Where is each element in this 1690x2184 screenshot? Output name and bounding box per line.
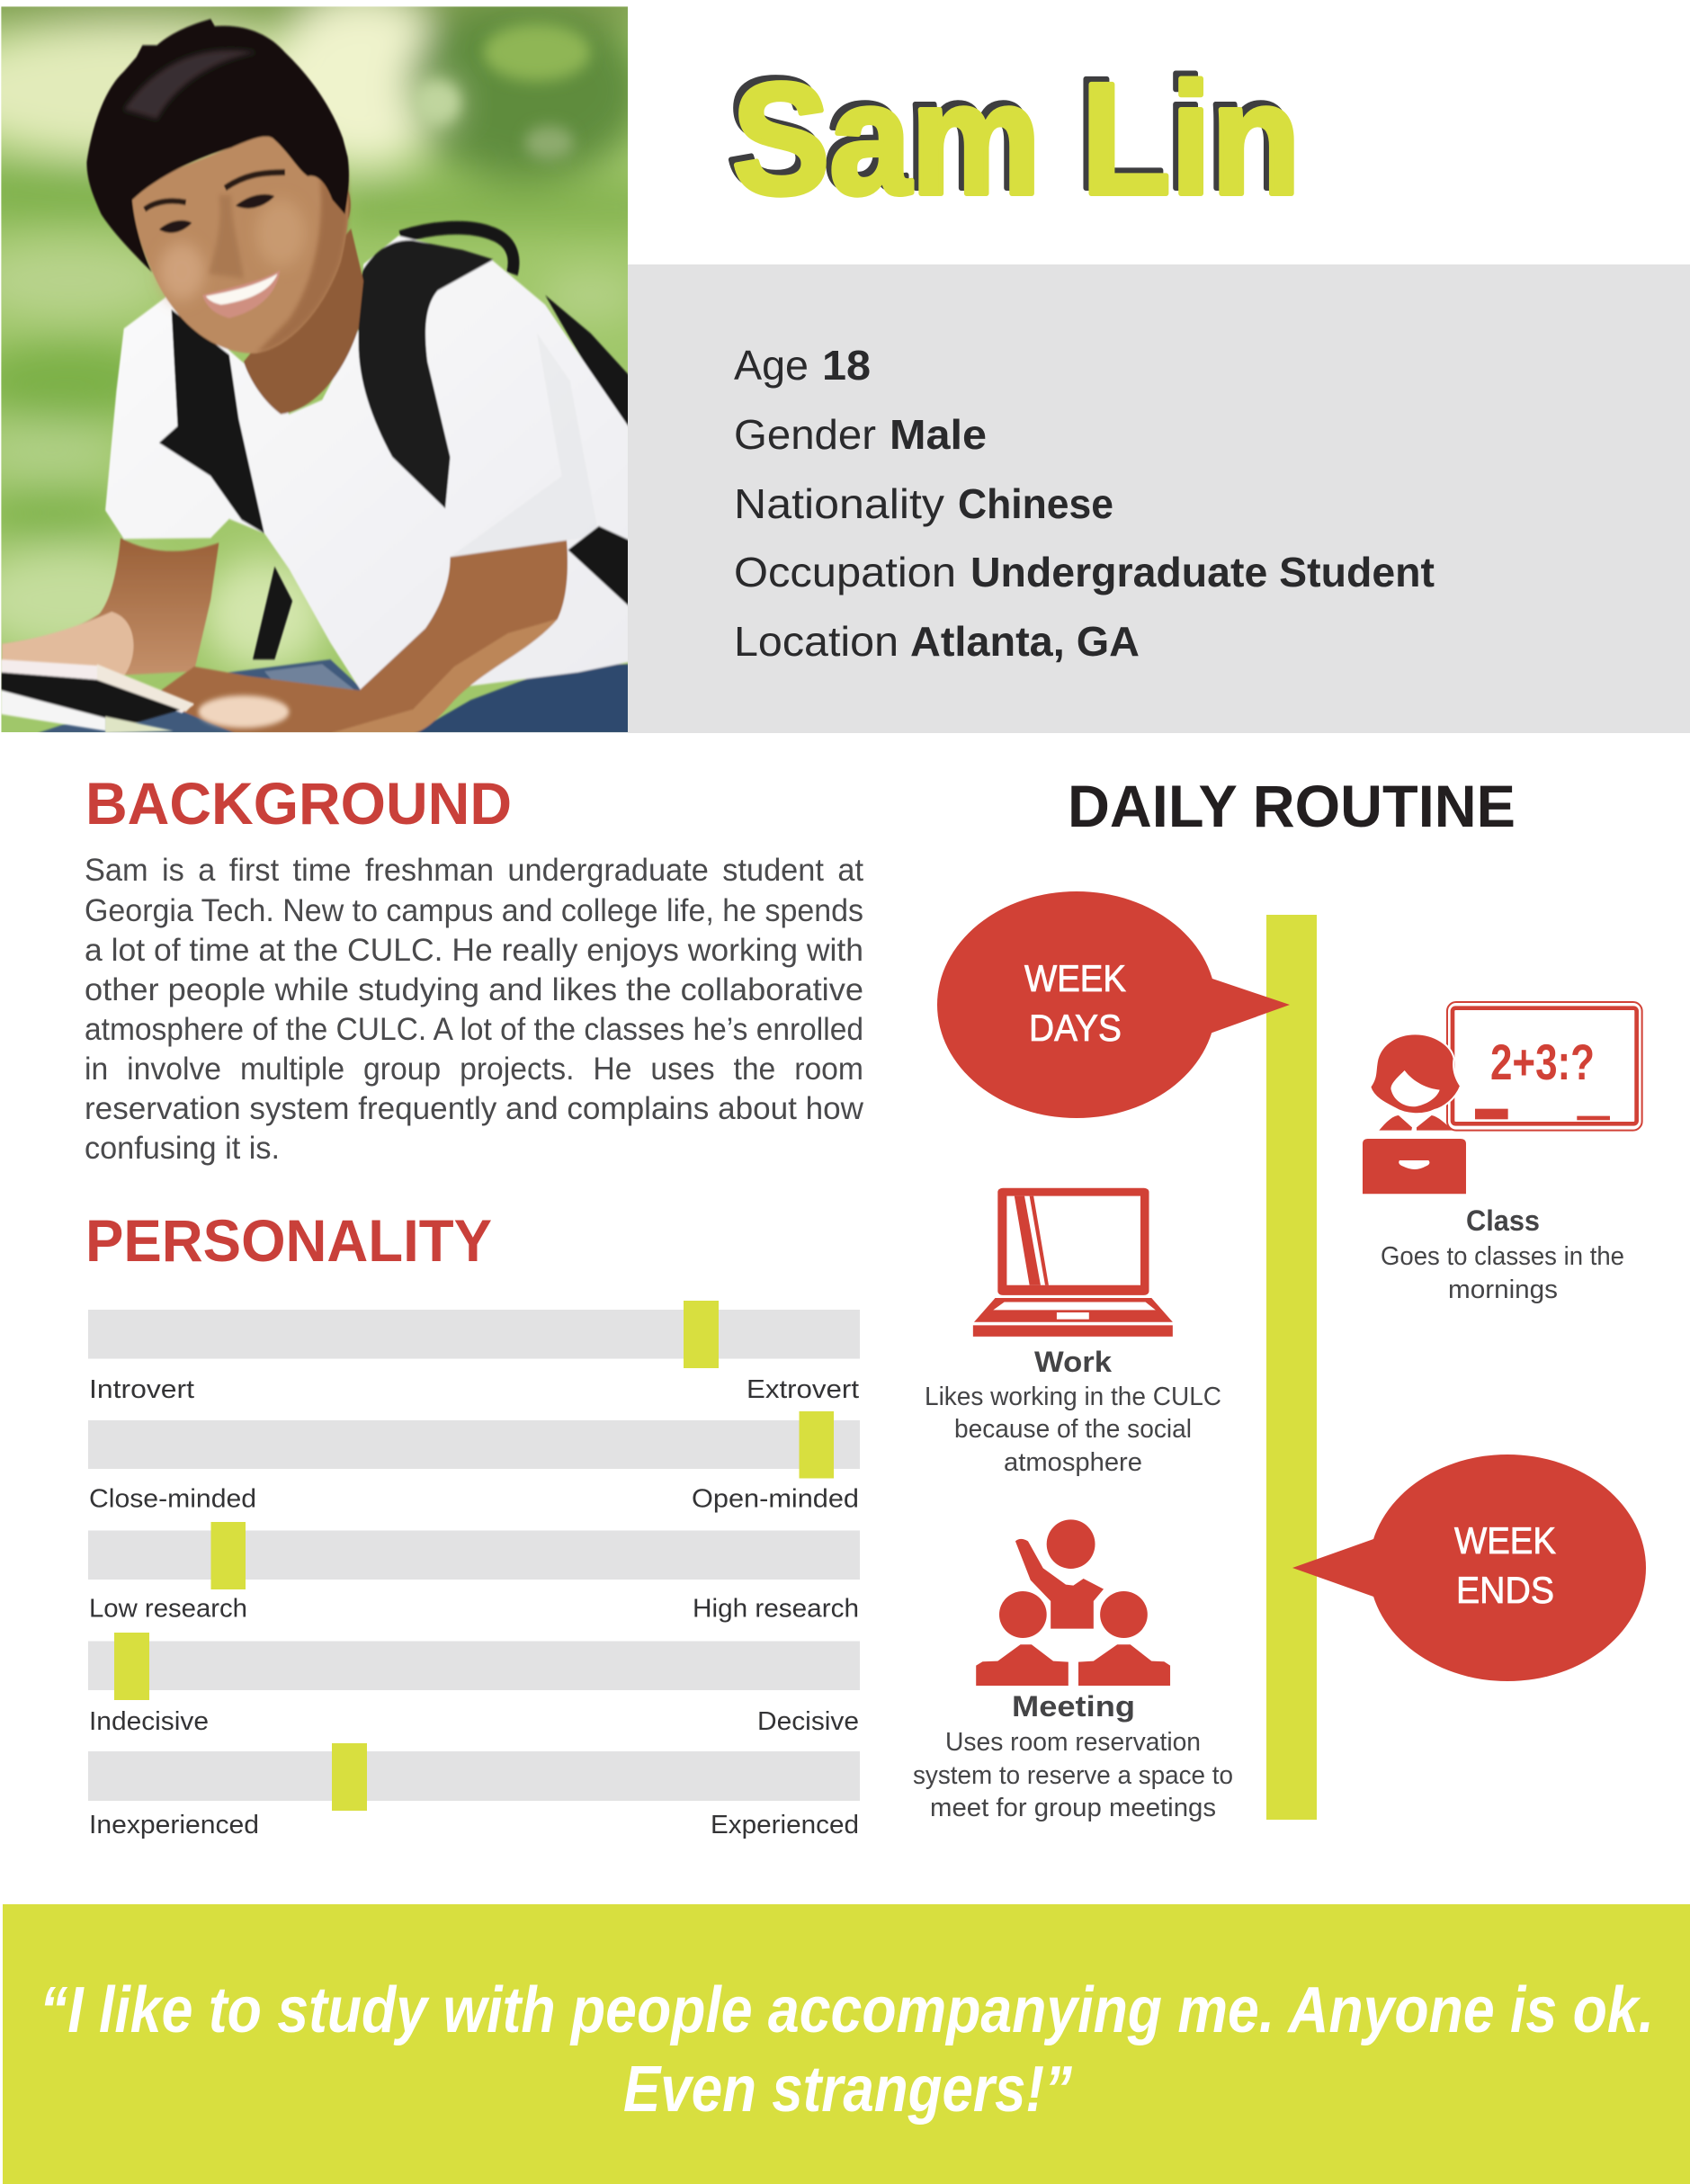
text block: background description: reservation system frequently and complains about how	[85, 1091, 864, 1126]
age: 18	[822, 342, 871, 389]
slider: inexperienced to experienced: Experienced	[711, 1811, 859, 1839]
occupation: Undergraduate Student	[970, 549, 1435, 595]
hair	[86, 19, 349, 273]
slider: introvert to extrovert	[88, 1301, 860, 1404]
lower strap	[253, 567, 292, 659]
text: work: because of the social	[954, 1415, 1192, 1444]
callout: week days	[937, 891, 1290, 1118]
occupation	[734, 549, 1435, 595]
text: meeting: system to reserve a space to	[913, 1761, 1233, 1790]
gender: Gender	[734, 411, 876, 458]
text block: background description: other people while studying and likes the collaborative	[85, 972, 863, 1007]
text: meeting	[913, 1690, 1233, 1822]
slider: close-minded to open-minded: Close-minded	[89, 1484, 256, 1513]
heading: personality: PERSONALITY	[85, 1207, 492, 1274]
age	[734, 342, 871, 389]
text: class: Goes to classes in the	[1381, 1242, 1624, 1271]
right arm	[161, 541, 568, 733]
left arm	[84, 538, 219, 676]
callout: week ends: WEEK	[1454, 1519, 1556, 1562]
text block: background description: Georgia Tech. New to campus and college life, he spends	[85, 893, 863, 928]
text: class	[1381, 1204, 1624, 1304]
face	[124, 124, 348, 354]
text block: background description: atmosphere of the CULC. A lot of the classes he’s enrolled	[85, 1012, 863, 1047]
text: work: atmosphere	[1004, 1448, 1142, 1477]
location: Atlanta, GA	[910, 618, 1140, 665]
smile	[202, 271, 280, 318]
callout: week days: WEEK	[1024, 957, 1126, 999]
slider: low research to high research	[88, 1522, 860, 1623]
text block: background description: confusing it is.	[85, 1131, 280, 1166]
callout: week ends	[1292, 1455, 1646, 1681]
text block: background description: a lot of time at the CULC. He really enjoys working with	[85, 933, 863, 968]
text: meeting: meet for group meetings	[930, 1794, 1216, 1822]
eyes	[159, 220, 192, 233]
gender: Male	[890, 411, 987, 458]
gender	[734, 411, 987, 458]
text: work: Likes working in the CULC	[925, 1383, 1221, 1411]
slider: inexperienced to experienced: Inexperienced	[89, 1811, 259, 1839]
left backpack strap	[159, 309, 264, 533]
text block: background description: Sam is a first time freshman undergraduate student at	[85, 853, 863, 888]
panel: name heading: Sam Lin	[732, 51, 1301, 228]
location	[734, 618, 1140, 665]
slider: introvert to extrovert: Extrovert	[747, 1375, 859, 1404]
slider: indecisive to decisive	[88, 1633, 860, 1736]
ear	[331, 183, 351, 226]
text: work: Work	[1034, 1346, 1112, 1378]
slider: indecisive to decisive: Decisive	[757, 1707, 859, 1736]
chart: personality sliders	[88, 1301, 860, 1839]
photo: smiling student with backpack	[0, 0, 657, 733]
book	[1, 659, 194, 733]
location: Location	[734, 618, 899, 665]
timeline bar	[1266, 915, 1317, 1820]
slider: inexperienced to experienced	[88, 1743, 860, 1839]
nationality: Nationality	[734, 480, 944, 527]
icon: teacher at whiteboard	[1363, 1002, 1642, 1194]
right backpack strap	[359, 240, 494, 508]
jeans	[37, 659, 413, 733]
panel: quote: Even strangers!”	[623, 2054, 1072, 2126]
panel: name heading: Sam Lin	[727, 46, 1295, 222]
slider: close-minded to open-minded	[88, 1411, 860, 1513]
text block: background description: in involve multiple group projects. He uses the room	[85, 1052, 863, 1087]
text: work	[925, 1346, 1221, 1477]
callout: week ends: ENDS	[1456, 1569, 1554, 1611]
slider: low research to high research: High research	[693, 1594, 859, 1623]
slider: introvert to extrovert: Introvert	[89, 1375, 194, 1404]
text: meeting: Meeting	[1012, 1690, 1135, 1723]
icon: meeting group	[976, 1519, 1170, 1686]
neck	[244, 228, 363, 414]
age: Age	[734, 342, 809, 389]
slider: close-minded to open-minded: Open-minded	[692, 1484, 859, 1513]
icon: laptop	[973, 1188, 1173, 1337]
heading: background: BACKGROUND	[85, 770, 512, 837]
heading: daily routine: DAILY ROUTINE	[1068, 773, 1516, 839]
panel: demographics	[628, 264, 1690, 733]
nationality: Chinese	[958, 480, 1113, 527]
callout: week days: DAYS	[1029, 1007, 1122, 1049]
text: class: Class	[1466, 1204, 1540, 1237]
panel: quote	[3, 1904, 1690, 2184]
text: meeting: Uses room reservation	[945, 1728, 1201, 1757]
icon: teacher at whiteboard: 2+3:?	[1490, 1034, 1595, 1090]
t-shirt	[105, 236, 630, 692]
text: class: mornings	[1448, 1275, 1558, 1304]
backpack handle	[400, 228, 514, 273]
nationality	[734, 480, 1113, 527]
occupation: Occupation	[734, 549, 956, 595]
text block: background description	[85, 853, 864, 1166]
slider: indecisive to decisive: Indecisive	[89, 1707, 209, 1736]
slider: low research to high research: Low research	[89, 1594, 247, 1623]
